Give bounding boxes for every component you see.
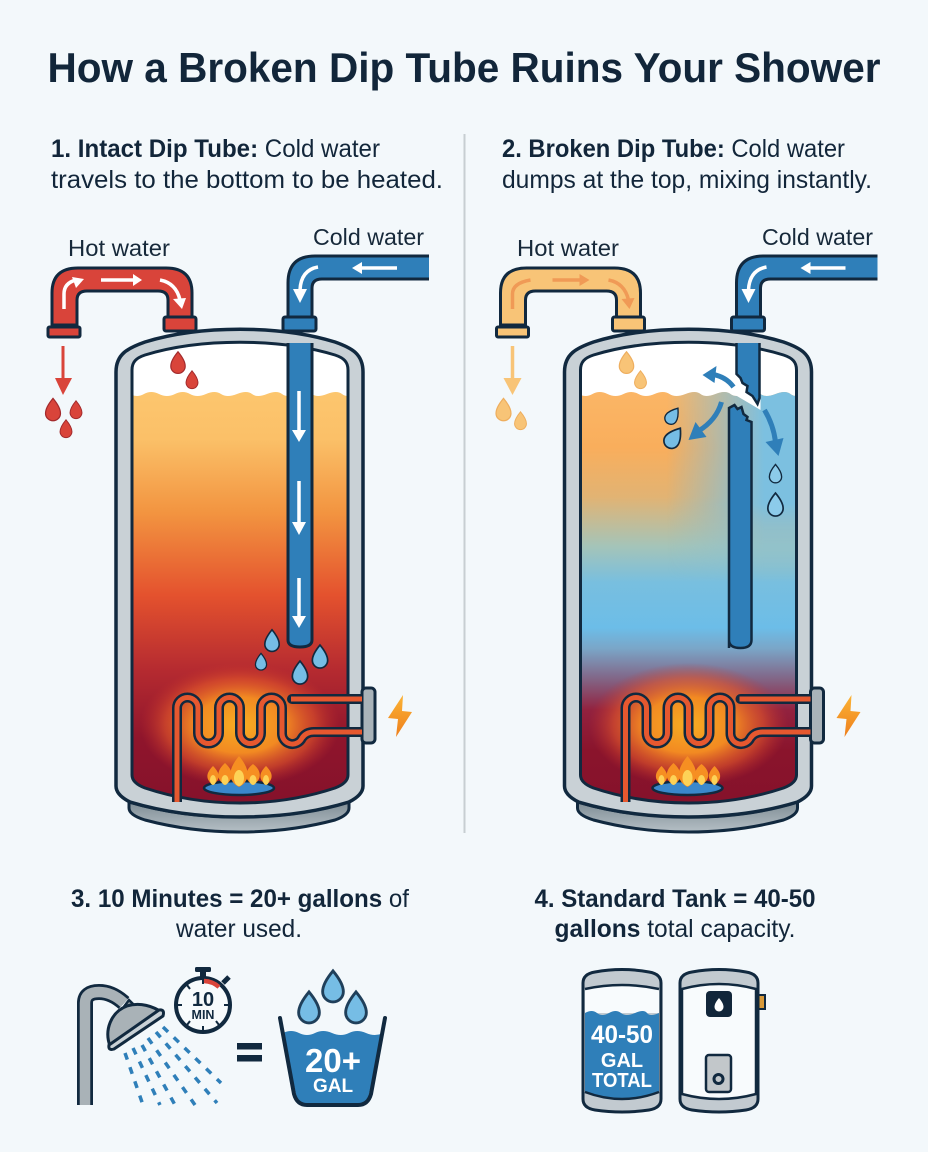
label: cold water: Cold water — [762, 224, 873, 250]
text: standard tank: 4. Standard Tank = 40-50 — [534, 885, 816, 913]
heating coil and burner — [626, 688, 824, 802]
drops above water — [619, 352, 646, 389]
icon: tank cutaway — [583, 970, 661, 1112]
heading: broken dip tube — [502, 135, 872, 194]
panel: broken tank diagram — [496, 224, 878, 832]
cold water pipe and dip tube — [283, 256, 429, 331]
drops above water — [171, 352, 198, 389]
icon: ten minute stopwatch: MIN — [192, 1008, 214, 1022]
text: standard tank: gallons total capacity. — [554, 915, 796, 943]
splash drops — [661, 405, 783, 516]
icon: tank exterior — [680, 970, 765, 1112]
lukewarm water pipe — [496, 268, 644, 337]
splash arrows — [688, 366, 784, 456]
broken dip tube upper — [736, 343, 760, 404]
icon: lightning bolt — [388, 695, 412, 737]
text: standard tank — [534, 885, 816, 943]
cold water pipe — [732, 256, 878, 331]
hot water pipe — [48, 268, 196, 337]
title: How a Broken Dip Tube Ruins Your Shower — [48, 44, 880, 91]
heating coil and burner — [177, 688, 375, 802]
heading: intact dip tube: 1. Intact Dip Tube: Cold water — [51, 135, 380, 163]
icon: ten minute stopwatch: 10 — [192, 989, 214, 1011]
tank shell — [116, 329, 363, 817]
cold drops leaving tube — [255, 630, 328, 684]
tank base — [129, 802, 349, 832]
icon: bucket of twenty plus gallons: GAL — [313, 1076, 353, 1097]
label: hot water: Hot water — [517, 235, 619, 261]
hot water body — [130, 335, 357, 810]
label: hot water: Hot water — [68, 235, 170, 261]
text: ten minutes: 3. 10 Minutes = 20+ gallons of — [71, 885, 409, 913]
icon: bucket of twenty plus gallons — [280, 971, 385, 1105]
lukewarm outflow arrow and drips — [496, 346, 526, 430]
icon: ten minute stopwatch — [176, 967, 230, 1032]
icon: equals sign — [237, 1043, 262, 1062]
icon: tank cutaway: GAL — [601, 1050, 643, 1072]
mixed water body — [578, 335, 806, 810]
dip tube — [288, 343, 312, 647]
icon: lightning bolt — [836, 695, 860, 737]
icon: shower head — [85, 992, 221, 1105]
text: ten minutes: water used. — [175, 915, 302, 943]
text: ten minutes — [71, 885, 409, 943]
heading: intact dip tube — [51, 135, 443, 194]
icon: bucket of twenty plus gallons: 20+ — [305, 1042, 361, 1079]
heading: broken dip tube: dumps at the top, mixing instantly. — [502, 166, 872, 194]
tank shell — [564, 329, 812, 817]
heading: broken dip tube: 2. Broken Dip Tube: Cold water — [502, 135, 845, 163]
icon: tank cutaway: 40-50 — [591, 1021, 653, 1049]
tank base — [578, 802, 798, 832]
broken dip tube lower — [729, 405, 752, 648]
icon: tank cutaway: TOTAL — [592, 1070, 652, 1092]
label: cold water: Cold water — [313, 224, 424, 250]
hot outflow arrow and drips — [46, 346, 82, 438]
heading: intact dip tube: travels to the bottom to be heated. — [51, 166, 443, 194]
panel: intact tank diagram — [46, 224, 429, 832]
